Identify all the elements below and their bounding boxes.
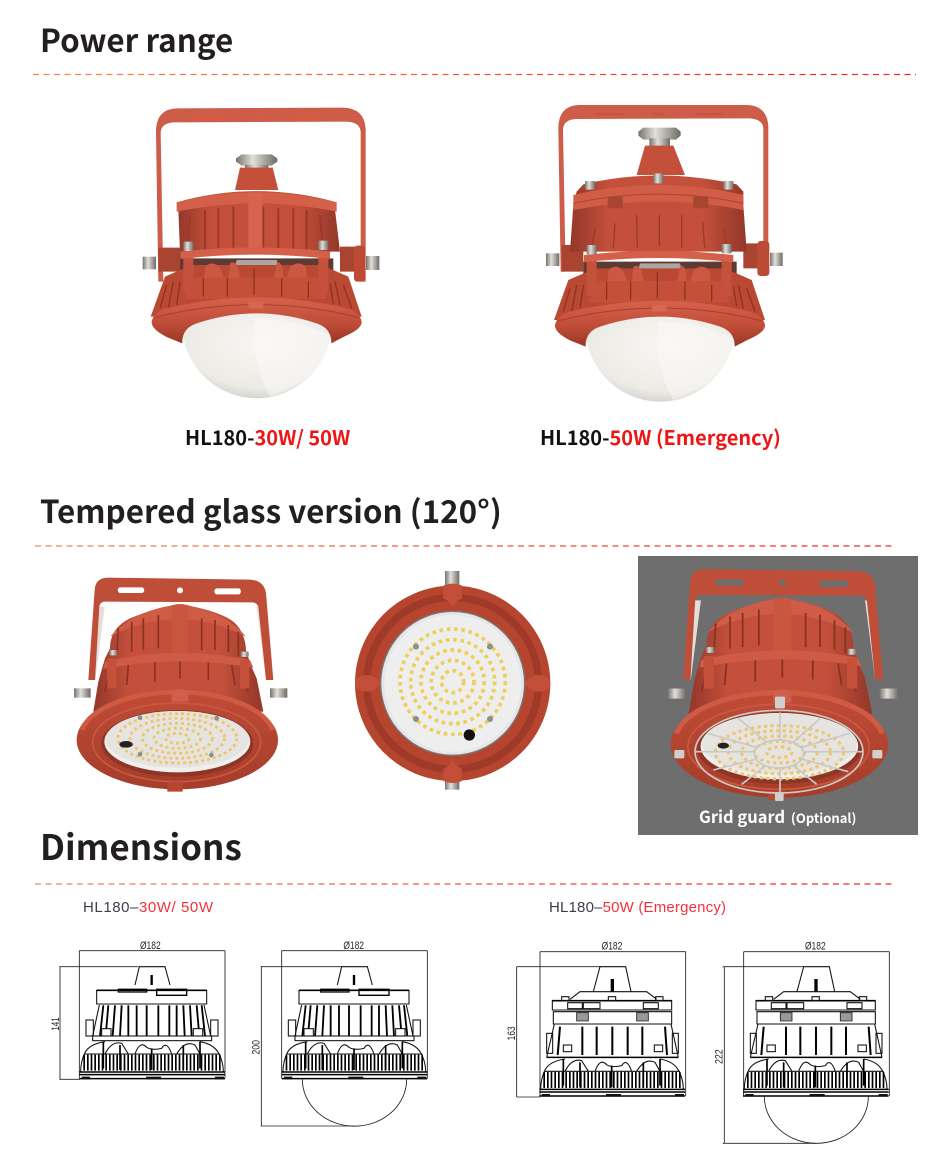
drawing: 163 mm height, no dome bbox=[506, 940, 686, 1097]
panel: grid guard bbox=[638, 556, 918, 835]
drawing: 222 mm height, with dome bbox=[714, 940, 889, 1143]
product photo: lamp with grid guard bbox=[668, 569, 898, 801]
heading: Dimensions: Dimensions bbox=[40, 820, 242, 871]
drawing: 163 mm height, no dome: Ø182 bbox=[602, 940, 622, 952]
product photo: HL180 50W emergency lamp bbox=[546, 105, 783, 402]
drawing: 141 mm height, no dome: Ø182 bbox=[140, 940, 161, 952]
drawing: 222 mm height, with dome: Ø182 bbox=[805, 940, 826, 952]
drawing: 222 mm height, with dome: 222 bbox=[714, 1049, 726, 1064]
drawing: 163 mm height, no dome: 163 bbox=[506, 1026, 518, 1040]
drawing: 200 mm height, with dome bbox=[250, 940, 427, 1126]
drawing: 200 mm height, with dome: Ø182 bbox=[343, 940, 364, 952]
drawing: 141 mm height, no dome: 141 bbox=[50, 1017, 62, 1031]
label: HL180-30W/ 50W: HL180-30W/ 50W bbox=[185, 422, 350, 451]
product photo: tempered glass front view bbox=[355, 571, 550, 790]
label: HL180-50W (Emergency): HL180-50W (Emergency) bbox=[540, 422, 781, 451]
drawing: 200 mm height, with dome: 200 bbox=[250, 1040, 262, 1055]
product photo: HL180 30W/50W lamp bbox=[143, 108, 379, 398]
heading: Tempered glass version: Tempered glass version (120°) bbox=[40, 488, 502, 533]
caption: Grid guard (Optional): Grid guard (Optional) bbox=[699, 804, 856, 828]
heading: Power range: Power range bbox=[40, 17, 233, 62]
subtitle: HL180-30W/ 50W: HL180–30W/ 50W bbox=[83, 899, 214, 916]
drawing: 141 mm height, no dome bbox=[50, 940, 225, 1079]
subtitle: HL180-50W (Emergency): HL180–50W (Emergency) bbox=[549, 899, 726, 916]
product photo: tempered glass angled view bbox=[74, 578, 287, 792]
